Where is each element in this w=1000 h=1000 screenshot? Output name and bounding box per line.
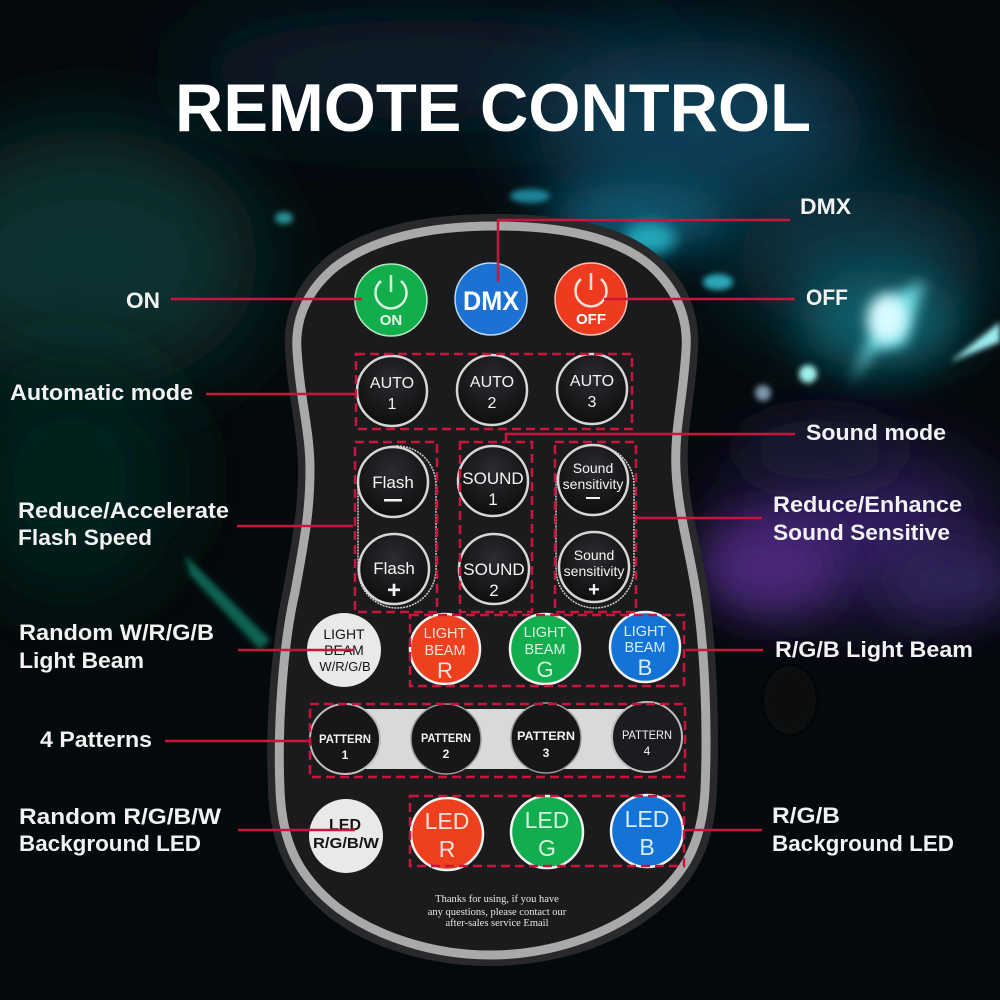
button: Light Beam R: LIGHT [424,626,466,642]
button: Sound sensitivity plus: sensitivity [564,563,624,579]
button: Light Beam G: LIGHT [524,625,566,641]
button: SOUND 1 [458,446,528,516]
red leader lines [165,220,795,830]
button: LED B: B [639,834,655,860]
button: ON [355,264,427,336]
button: Sound sensitivity minus [558,445,628,515]
AUTO buttons [357,354,627,426]
title: REMOTE CONTROL [175,70,811,146]
button: AUTO 3: AUTO [570,373,614,390]
printed thank-you note: Thanks for using, if you have [435,894,559,905]
button: Sound sensitivity plus: + [588,579,600,601]
button: Light Beam G [510,614,580,684]
printed thank-you note: after-sales service Email [446,918,549,929]
Flash, Sound and Sensitivity buttons [358,445,629,604]
button: Sound sensitivity plus: Sound [574,547,614,563]
button: Sound sensitivity minus: Sound [573,460,613,476]
label: Random W/R/G/B Light Beam: Light Beam [19,648,144,673]
button: Light Beam R [410,614,480,684]
button: Light Beam B: LIGHT [624,624,666,640]
Background LED buttons [309,795,683,873]
label: R/G/B Light Beam: R/G/B Light Beam [775,637,973,662]
button: AUTO 2: 2 [488,395,497,412]
power buttons row [355,263,627,336]
button: Flash plus: Flash [373,559,415,578]
label: 4 Patterns: 4 Patterns [40,727,152,752]
button: LED G [511,796,583,868]
button: Light Beam W/R/G/B [307,613,381,687]
label: Random W/R/G/B Light Beam: Random W/R/G/B [19,620,214,645]
button: DMX [455,263,527,335]
remote control body [267,214,718,966]
button: Pattern 3: PATTERN [517,729,575,743]
label: OFF: OFF [806,285,848,310]
button: AUTO 1: 1 [388,396,397,413]
label: Reduce/Enhance Sound Sensitive [773,492,962,545]
button: LED R [411,798,483,870]
button: Flash minus [358,447,428,517]
printed thank-you note: any questions, please contact our [428,907,567,918]
label: DMX: DMX [800,194,851,219]
button: SOUND 2: 2 [489,581,499,600]
button: Pattern 4: 4 [644,744,651,758]
button: Light Beam G: G [536,657,554,682]
button: Pattern 2: 2 [443,747,450,761]
button: AUTO 2: AUTO [470,374,514,391]
button: LED R/G/B/W: LED [329,817,361,834]
button: Pattern 3 [511,703,581,773]
button: Light Beam G: BEAM [524,642,566,658]
button: AUTO 3 [557,354,627,424]
button: LED G: G [538,835,556,861]
label: Random R/G/B/W Background LED: Random R/G/B/W [19,804,221,829]
button: Light Beam B: B [638,655,652,680]
label: R/G/B Background LED [772,803,954,856]
label: Reduce/Enhance Sound Sensitive: Sound Sensitive [773,520,950,545]
label: Random W/R/G/B Light Beam [19,620,214,673]
button: ON: ON [380,312,402,329]
button: Pattern 1: 1 [342,748,349,762]
button: AUTO 3: 3 [588,394,597,411]
button: Light Beam B [610,612,680,682]
button: SOUND 2 [459,534,529,604]
label: Reduce/Accelerate Flash Speed: Reduce/Accelerate [18,498,229,523]
Light Beam buttons [307,612,680,687]
button: SOUND 1: 1 [488,490,498,509]
Pattern buttons [310,702,682,774]
button: SOUND 2: SOUND [463,560,525,579]
label: R/G/B Background LED: R/G/B [772,803,840,828]
button: LED R/G/B/W: R/G/B/W [313,835,380,852]
button: Pattern 1: PATTERN [319,732,371,746]
button: LED B [611,795,683,867]
button: LED G: LED [525,807,569,833]
button: Light Beam W/R/G/B: BEAM [324,642,364,658]
callout labels [10,194,973,856]
button: Sound sensitivity minus: sensitivity [563,476,623,492]
label: Reduce/Accelerate Flash Speed [18,498,229,550]
button: Light Beam R: BEAM [424,643,466,659]
button: Pattern 3: 3 [543,746,550,760]
button: Sound sensitivity plus [559,532,629,602]
button: Flash minus: Flash [372,473,414,492]
button: Pattern 2 [411,704,481,774]
button: OFF [555,263,627,335]
button: OFF: OFF [576,311,606,328]
button: AUTO 1 [357,356,427,426]
button: LED R: LED [425,808,469,834]
dashed red selection boxes [310,354,685,866]
printed thank-you note [428,894,567,929]
button: Pattern 4 [612,702,682,772]
button: SOUND 1: SOUND [462,469,524,488]
button: Light Beam W/R/G/B: LIGHT [323,626,365,642]
button: Pattern 2: PATTERN [421,731,471,745]
button: Pattern 1 [310,704,380,774]
label: ON: ON [126,288,160,313]
label: Sound mode: Sound mode [806,420,946,445]
label: Automatic mode: Automatic mode [10,380,193,405]
label: Reduce/Accelerate Flash Speed: Flash Speed [18,525,152,550]
button: LED R: R [439,836,455,862]
button: Light Beam W/R/G/B: W/R/G/B [319,659,371,674]
button: Pattern 4: PATTERN [622,728,672,742]
label: Random R/G/B/W Background LED [19,804,221,856]
button: Light Beam R: R [437,658,453,683]
button: Light Beam B: BEAM [624,640,666,656]
label: Reduce/Enhance Sound Sensitive: Reduce/Enhance [773,492,962,517]
label: Random R/G/B/W Background LED: Background LED [19,831,201,856]
button: LED R/G/B/W [309,799,383,873]
label: R/G/B Background LED: Background LED [772,831,954,856]
button: AUTO 1: AUTO [370,375,414,392]
button: DMX: DMX [463,286,519,316]
button: Flash plus: + [387,577,401,604]
button: LED B: LED [625,806,669,832]
button: Flash plus [359,534,429,604]
button: AUTO 2 [457,355,527,425]
stage light flare [275,189,1000,401]
